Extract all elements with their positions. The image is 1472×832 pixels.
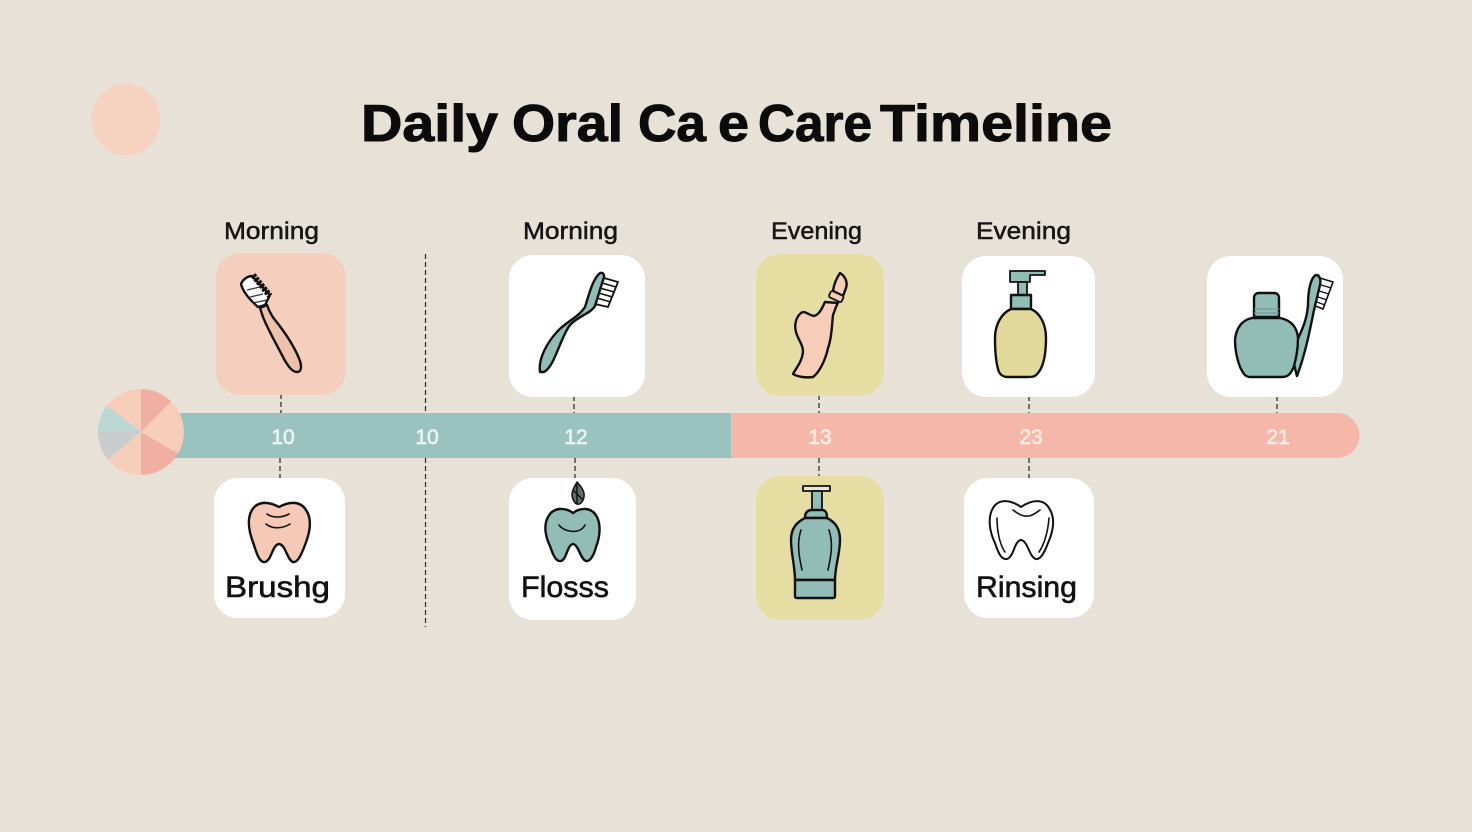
card: teal toothbrush (509, 255, 645, 397)
heading: Evening 1: Evening (771, 218, 862, 245)
timeline numbers: 13 (808, 426, 832, 449)
heading: Morning 2: Morning (523, 218, 618, 245)
timeline numbers (271, 426, 1290, 449)
pie chart marker (98, 389, 184, 475)
timeline bar (170, 413, 1360, 458)
title: Oral (512, 95, 623, 153)
decorative peach circle (92, 84, 160, 156)
title: Care (758, 95, 872, 153)
icon: peach tooth (249, 503, 310, 562)
card: bottle and toothbrush (1207, 256, 1343, 397)
timeline numbers: 10 (415, 426, 439, 449)
icon: white tooth (990, 501, 1053, 559)
timeline numbers: 23 (1019, 426, 1043, 449)
icon: floss knot (572, 482, 584, 504)
card: Floss (509, 478, 636, 620)
icon: teal tooth (545, 509, 600, 561)
label: Brushg: Brushg (225, 571, 330, 604)
timeline numbers: 10 (271, 426, 295, 449)
label: Flosss: Flosss (521, 571, 609, 604)
heading: Morning 1: Morning (224, 218, 319, 245)
connector lines (280, 254, 1277, 627)
timeline numbers: 21 (1266, 426, 1290, 449)
card: soap dispenser (962, 256, 1095, 397)
card: Brushing (214, 478, 345, 618)
card: Rinsing (964, 478, 1094, 618)
timeline numbers: 12 (564, 426, 588, 449)
title: e (718, 95, 749, 153)
title: Ca (638, 95, 707, 153)
card: toothbrush on peach (216, 253, 346, 395)
title (361, 95, 1112, 153)
card: peach brush head on yellow (756, 254, 884, 396)
title: Timeline (880, 95, 1112, 153)
card: mouthwash bottle on yellow (756, 476, 884, 620)
title: Daily (361, 95, 498, 153)
heading: Evening 2: Evening (976, 218, 1071, 245)
label: Rinsing: Rinsing (976, 571, 1077, 604)
